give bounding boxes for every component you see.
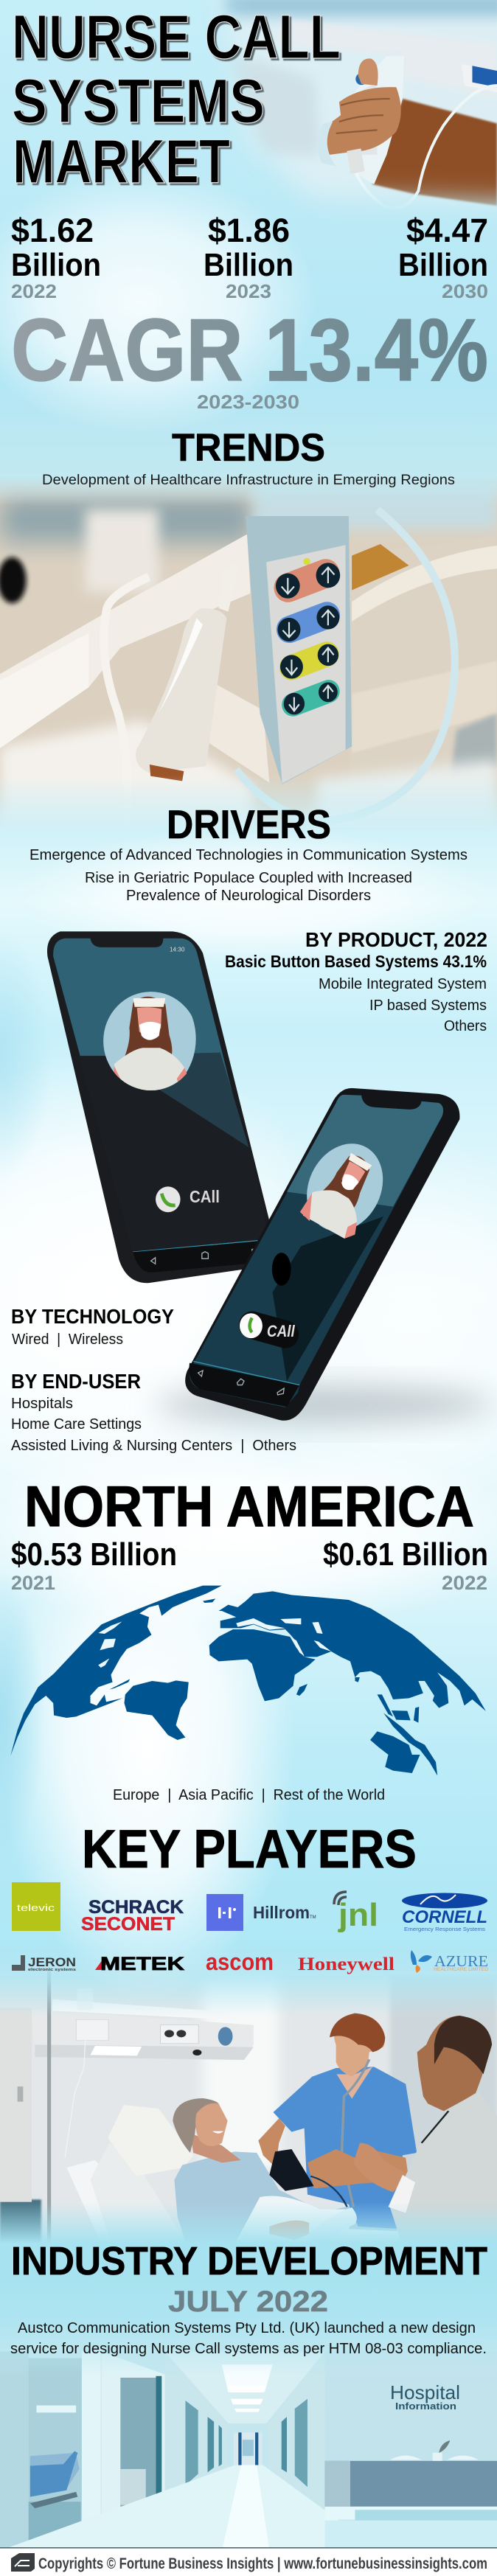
stat: 2023 value: 2023 [226,280,271,302]
stat: 2021 value [11,1536,177,1594]
logo: azure healthcare [411,1950,489,1973]
sign: hospital information: Information [395,2401,456,2412]
logo: azure healthcare: AZURE [434,1952,488,1970]
text: other regions: Europe | Asia Pacific | Rest of the World [113,1787,385,1803]
logo: schrack seconet [81,1897,184,1935]
logo: schrack seconet: SCHRACK [88,1897,184,1918]
stat: 2022 value [323,1536,488,1594]
panel: by technology: Wired | Wireless [12,1331,123,1348]
icon: second phone: CAll [267,1322,296,1340]
text: driver two: Prevalence of Neurological Disorders [126,888,371,904]
phones illustration [47,931,459,1421]
photo: bed remote control handset [0,476,497,845]
logo: cornell [402,1893,487,1932]
icon: second phone [185,1088,459,1421]
title: Nurse Call Systems Market: NURSE CALL [12,2,341,72]
logo: ascom: ascom [206,1949,274,1975]
text: driver one: Emergence of Advanced Technologies in Communication Systems [29,847,468,863]
footer [0,2547,497,2576]
panel: by end-user: Hospitals [11,1396,73,1412]
logo: jnl: jnl [338,1897,378,1933]
text: development description: Austco Communication Systems Pty Ltd. (UK) launched a new design [18,2320,476,2336]
logo: hillrom: Hillrom [253,1903,310,1922]
panel: by end-user: Home Care Settings [11,1416,142,1433]
panel: by product: Mobile Integrated System [319,976,487,992]
icon: first phone: 14:30 [170,945,185,953]
heading and market figures block [11,2,488,488]
logo: jeron: electronic systems [28,1968,76,1972]
stat: 2030 value: $4.47 [406,212,488,249]
logo: hillrom: TM [310,1915,316,1920]
stat: 2022 value: 2022 [442,1572,487,1594]
stat: 2021 value: 2021 [11,1572,55,1594]
panel: by technology [11,1305,174,1348]
icon: first phone [47,931,274,1283]
heading: north america: NORTH AMERICA [24,1474,474,1539]
logo: jeron [12,1955,76,1972]
stat: 2021 value: $0.53 Billion [11,1536,177,1573]
text: development description [10,2320,487,2357]
logo: fortune business insights [11,2553,35,2572]
icon: phone shadow [155,1385,494,1424]
heading: key players: KEY PLAYERS [82,1820,417,1879]
photo: hand pressing nurse call button [221,0,497,211]
logo: cornell: Emergency Response Systems [404,1927,486,1932]
stat: 2030 value [398,212,488,302]
photo: hospital corridor [0,2347,497,2547]
logo: ametek: METEK [100,1954,184,1974]
title: Nurse Call Systems Market: MARKET [13,127,230,196]
stat: 2023 value [204,212,293,302]
stat: 2022 value: Billion [11,247,101,283]
stat: 2023 value: Billion [204,247,293,283]
photo: hospital room with patient [0,1970,497,2240]
stat: 2030 value: Billion [398,247,488,283]
text: driver two [85,870,412,904]
text: development description: service for designing Nurse Call systems as per HTM 08-03 compliance. [10,2341,487,2357]
panel: by product: IP based Systems [369,998,487,1014]
date: july 2022: JULY 2022 [168,2286,328,2318]
logo: honeywell: Honeywell [298,1954,395,1974]
stat: 2022 value: $1.62 [11,212,94,249]
panel: company logos [12,1882,489,1975]
CAGR period: 2023-2030 [197,391,299,413]
logo: azure healthcare: HEALTHCARE LIMITED [434,1968,489,1972]
logo: televic [12,1882,60,1931]
logo: cornell: CORNELL [402,1907,487,1927]
stat: 2030 value: 2030 [442,280,488,302]
logo: hillrom [206,1894,316,1931]
logo: jeron: JERON [28,1955,76,1969]
text: driver two: Rise in Geriatric Populace Coupled with Increased [85,870,412,886]
text: trends description: Development of Healthcare Infrastructure in Emerging Regions [42,473,455,488]
stat: 2022 value: 2022 [11,280,57,302]
panel: by end-user: BY END-USER [11,1370,141,1393]
icon: first phone: CAll [190,1187,220,1206]
stat: 2022 value [11,212,101,302]
panel: by product: BY PRODUCT, 2022 [305,928,487,951]
logo: televic: televic [17,1902,55,1913]
heading: trends: TRENDS [172,426,325,470]
drivers section [29,801,468,904]
title: Nurse Call Systems Market [12,2,341,196]
heading: drivers: DRIVERS [167,801,331,847]
panel: by end-user: Assisted Living & Nursing Centers | Others [11,1438,296,1454]
title: Nurse Call Systems Market: SYSTEMS [12,66,265,136]
logo: schrack seconet: SECONET [81,1914,175,1935]
panel: by technology: BY TECHNOLOGY [11,1305,174,1328]
world map [10,1586,486,1775]
sign: hospital information: Hospital [390,2381,460,2403]
panel: by product: Others [444,1018,487,1034]
panel: by end-user [11,1370,296,1454]
stat: 2023 value: $1.86 [208,212,290,249]
panel: by product [225,928,487,1034]
panel: north america [11,1474,488,1594]
